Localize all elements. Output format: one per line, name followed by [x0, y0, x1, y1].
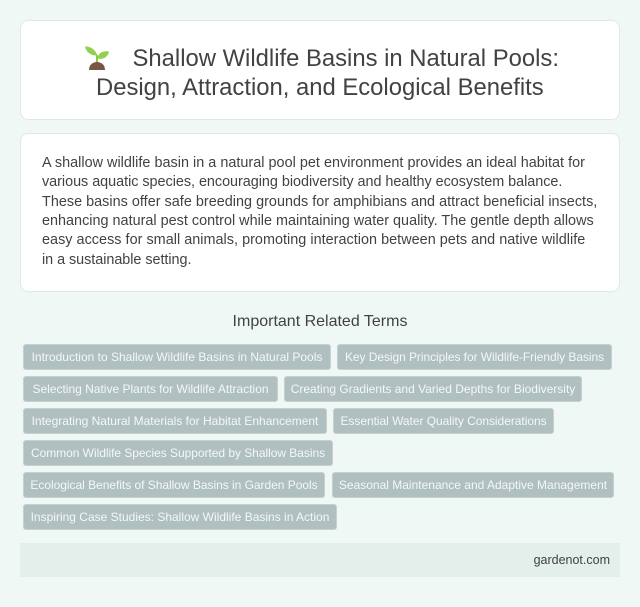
summary paragraph: These basins offer safe breeding grounds for amphibians and attract beneficial insects, — [42, 194, 597, 210]
tag 2: Key Design Principles for Wildlife-Friendly Basins — [345, 350, 604, 364]
title — [96, 45, 559, 101]
summary paragraph — [42, 155, 597, 268]
section heading: Important Related Terms — [233, 313, 407, 330]
tag 2 — [337, 344, 612, 370]
tag 9: Seasonal Maintenance and Adaptive Management — [339, 478, 607, 492]
tag 1: Introduction to Shallow Wildlife Basins in Natural Pools — [32, 350, 322, 364]
tag 10: Inspiring Case Studies: Shallow Wildlife Basins in Action — [31, 510, 329, 524]
icon: seedling — [85, 46, 109, 70]
tag 7 — [23, 440, 333, 466]
tag 5: Integrating Natural Materials for Habitat Enhancement — [32, 414, 318, 428]
tag 4: Creating Gradients and Varied Depths for Biodiversity — [291, 382, 575, 396]
summary paragraph: in a sustainable setting. — [42, 252, 191, 268]
footer site name: gardenot.com — [534, 553, 610, 567]
tag 3: Selecting Native Plants for Wildlife Attraction — [32, 382, 269, 396]
tag 1 — [23, 344, 331, 370]
tag 6: Essential Water Quality Considerations — [340, 414, 547, 428]
tag 7: Common Wildlife Species Supported by Shallow Basins — [31, 446, 325, 460]
header panel — [20, 20, 620, 120]
summary paragraph: easy access for small animals, promoting interaction between pets and native wildlife — [42, 232, 585, 248]
tag 9 — [332, 472, 614, 498]
title: Design, Attraction, and Ecological Benefits — [96, 74, 544, 101]
tag 5 — [23, 408, 327, 434]
summary paragraph: enhancing natural pest control while maintaining water quality. The gentle depth allows — [42, 213, 594, 229]
tag 3 — [23, 376, 278, 402]
tag 4 — [284, 376, 582, 402]
tag 8: Ecological Benefits of Shallow Basins in Garden Pools — [30, 478, 318, 492]
footer bar — [20, 543, 620, 577]
summary paragraph: A shallow wildlife basin in a natural pool pet environment provides an ideal habitat for — [42, 155, 585, 171]
tag 6 — [333, 408, 554, 434]
summary paragraph: various aquatic species, encouraging biodiversity and healthy ecosystem balance. — [42, 174, 562, 190]
related terms tags — [23, 344, 614, 530]
title: Shallow Wildlife Basins in Natural Pools: — [132, 45, 559, 72]
tag 8 — [23, 472, 325, 498]
tag 10 — [23, 504, 337, 530]
summary text panel — [20, 133, 620, 292]
